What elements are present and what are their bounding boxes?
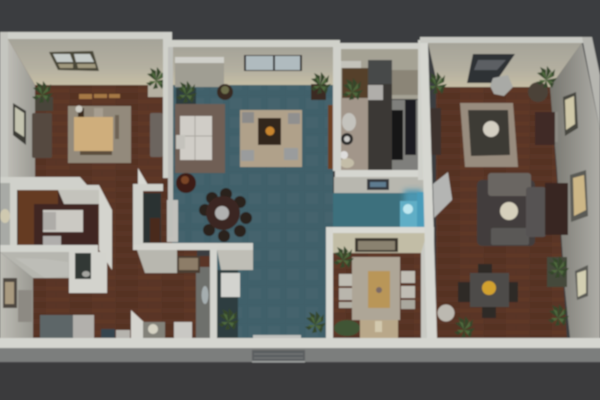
dryer (174, 322, 192, 338)
sofa left (32, 113, 52, 158)
plant left (333, 246, 354, 268)
icon: vent (252, 350, 305, 362)
dark alcove under appliance (217, 270, 238, 338)
back wall (0, 252, 69, 278)
nightstand (43, 236, 61, 245)
light floor (341, 98, 368, 170)
right outer wall (427, 227, 434, 338)
dark counter (368, 60, 392, 170)
plant and pot (176, 81, 197, 104)
window (355, 238, 398, 252)
toilet and fixtures (340, 113, 356, 168)
right wall (418, 40, 427, 180)
plant near room wall (305, 311, 326, 333)
corner plant (310, 72, 331, 100)
chairs right (401, 271, 415, 309)
dining table (74, 106, 119, 155)
side cabinet (545, 183, 568, 235)
square table and dish (468, 110, 510, 156)
plant left (426, 72, 447, 94)
sofa (40, 315, 94, 338)
top wall (340, 43, 420, 49)
panel: upper left living room (0, 32, 172, 192)
table (368, 271, 390, 308)
panel: central hallway wood floor (33, 178, 197, 338)
closet doors (175, 57, 224, 87)
skylight window (49, 51, 99, 71)
pot plant right (528, 66, 557, 102)
small closet (133, 168, 163, 245)
panel: right lounge (420, 37, 600, 338)
appliance (221, 273, 240, 297)
left wall (168, 47, 173, 237)
left wall (333, 47, 341, 171)
top wall (326, 227, 434, 233)
rug armchairs (241, 112, 300, 161)
sofa bed (175, 104, 225, 173)
sofa sectional (477, 173, 546, 246)
low white box (116, 330, 130, 338)
left wall (0, 252, 33, 338)
plant left (32, 81, 53, 111)
icon: glowing blue fixture (400, 190, 425, 227)
panel: central living area (167, 40, 425, 339)
round dining table and chairs (199, 188, 252, 242)
top wall (420, 37, 590, 43)
plants along wall (547, 256, 569, 326)
plant bottom (454, 316, 475, 338)
framed window (3, 278, 17, 308)
right wall (421, 233, 427, 338)
side table with flowers (176, 173, 196, 193)
windows on right wall (563, 92, 588, 300)
plant right in planter (146, 67, 167, 97)
tile floor lower (217, 245, 326, 338)
plant floor (334, 320, 360, 336)
chairs left (339, 274, 352, 308)
round planter (217, 84, 233, 100)
wooden door (328, 105, 335, 169)
bedroom floor (17, 185, 98, 245)
front wall cap (0, 338, 600, 348)
shelf with bottles (392, 70, 418, 95)
small blue box (101, 329, 115, 338)
wood above strip (200, 256, 210, 267)
room floor (8, 39, 165, 189)
ground below (0, 362, 600, 400)
bedroom left wall with clock (0, 183, 17, 245)
coffee table with flame (258, 118, 281, 145)
closet block (69, 252, 107, 293)
back wall (333, 233, 427, 253)
hanging wall panel (217, 250, 253, 270)
top walls (0, 177, 99, 190)
panel: kitchen (328, 40, 427, 193)
front wall fascia (0, 348, 600, 362)
dark skylight (467, 54, 515, 83)
floor (333, 253, 427, 338)
rug (68, 106, 131, 163)
partition wall front (137, 250, 177, 273)
rug (460, 103, 518, 167)
window (244, 55, 302, 71)
framed art (177, 256, 200, 273)
low white sill (253, 335, 301, 339)
back wall (172, 47, 333, 85)
panel: bedroom (0, 177, 112, 270)
washer (143, 322, 165, 338)
tile floor upper (172, 85, 333, 245)
panel: lower center dining room (326, 227, 434, 338)
bedroom bottom wall (0, 245, 98, 252)
panel: corridor and bathroom strip (133, 168, 217, 338)
back wall (340, 49, 418, 99)
round stool (438, 304, 454, 322)
armchair (490, 75, 513, 96)
bed (43, 210, 83, 232)
console left (430, 108, 441, 155)
bench (360, 320, 398, 338)
armchair right (150, 113, 163, 157)
stub wall (131, 310, 147, 338)
window on left wall (13, 103, 26, 145)
left wall (8, 39, 35, 178)
right wall (550, 43, 600, 338)
wall cap (217, 243, 253, 250)
left wall (326, 227, 333, 338)
rug (240, 110, 302, 167)
vertical wall (210, 247, 217, 338)
left wall (420, 43, 437, 338)
top wall (0, 32, 171, 39)
door panel on left wall (167, 200, 178, 242)
gray strip (196, 267, 210, 338)
rug (352, 257, 400, 320)
closet block (58, 190, 99, 204)
top wall (170, 40, 340, 47)
back wall (428, 43, 582, 87)
front wall with tv (334, 177, 425, 193)
partition cap (133, 243, 217, 250)
bright blue floor (333, 193, 425, 227)
plant (218, 308, 239, 330)
right wall (163, 32, 172, 192)
back wall (8, 39, 165, 85)
right outer wall (582, 37, 600, 130)
dining set (458, 264, 518, 318)
warm floor patch (18, 183, 58, 245)
panel: lower left room (0, 252, 192, 338)
tub fixture (433, 172, 452, 218)
console right (535, 112, 558, 145)
floor (436, 85, 567, 338)
shelf unit (341, 61, 368, 100)
bedroom right wall (99, 185, 112, 270)
bottom wall (335, 170, 425, 177)
right cabinets (392, 100, 418, 170)
outer left wall (0, 32, 8, 182)
mirror (202, 286, 208, 304)
picture frame (18, 290, 32, 322)
sunlight on floor (79, 94, 120, 99)
ceiling panel (15, 258, 68, 278)
